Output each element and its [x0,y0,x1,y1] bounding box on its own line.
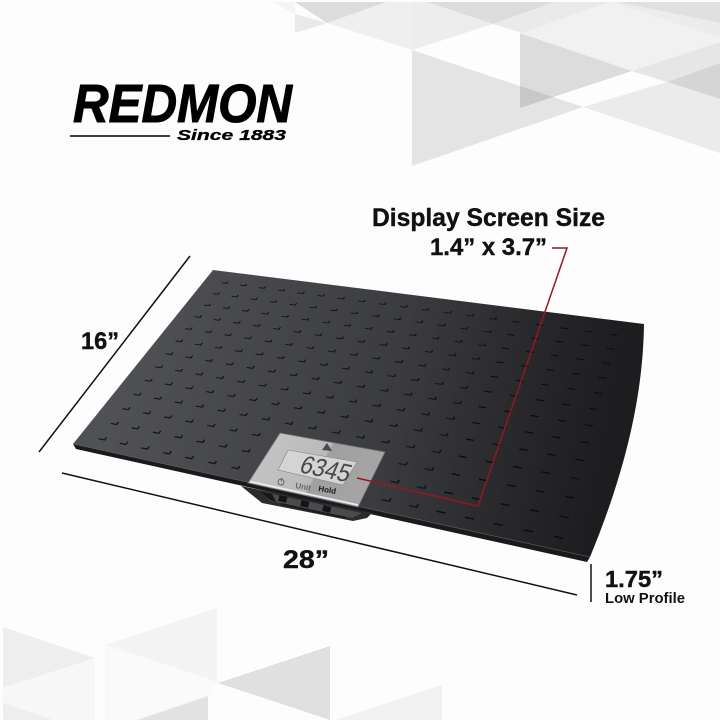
arrow: red leader line to display [357,248,567,506]
dimension: 1.75 inch low profile: 1.75” [605,566,663,592]
Hold label: Hold [318,484,337,496]
power icon [278,478,284,485]
logo: REDMON: Since 1883 [177,127,287,144]
logo: REDMON: REDMON [73,74,293,134]
Unit label: Unit [295,481,312,493]
dimension: 16 inch: 16” [81,328,119,355]
dimension: 28 inch: 28” [283,546,329,574]
brand icon on display [322,443,332,451]
callout heading: display screen size [372,205,605,261]
callout heading: display screen size: Display Screen Size [372,205,605,232]
callout heading: display screen size: 1.4” x 3.7” [430,234,547,261]
LCD reading: 6345 [296,451,356,488]
foot under display [241,486,372,521]
dimension: 16 inch [39,256,190,452]
display panel [248,433,385,507]
scale surface studs [98,282,618,539]
dimension: 1.75 inch low profile [591,564,685,607]
LCD screen [278,450,357,485]
dimension: 28 inch [62,473,577,595]
dimension: 1.75 inch low profile: Low Profile [605,591,685,607]
